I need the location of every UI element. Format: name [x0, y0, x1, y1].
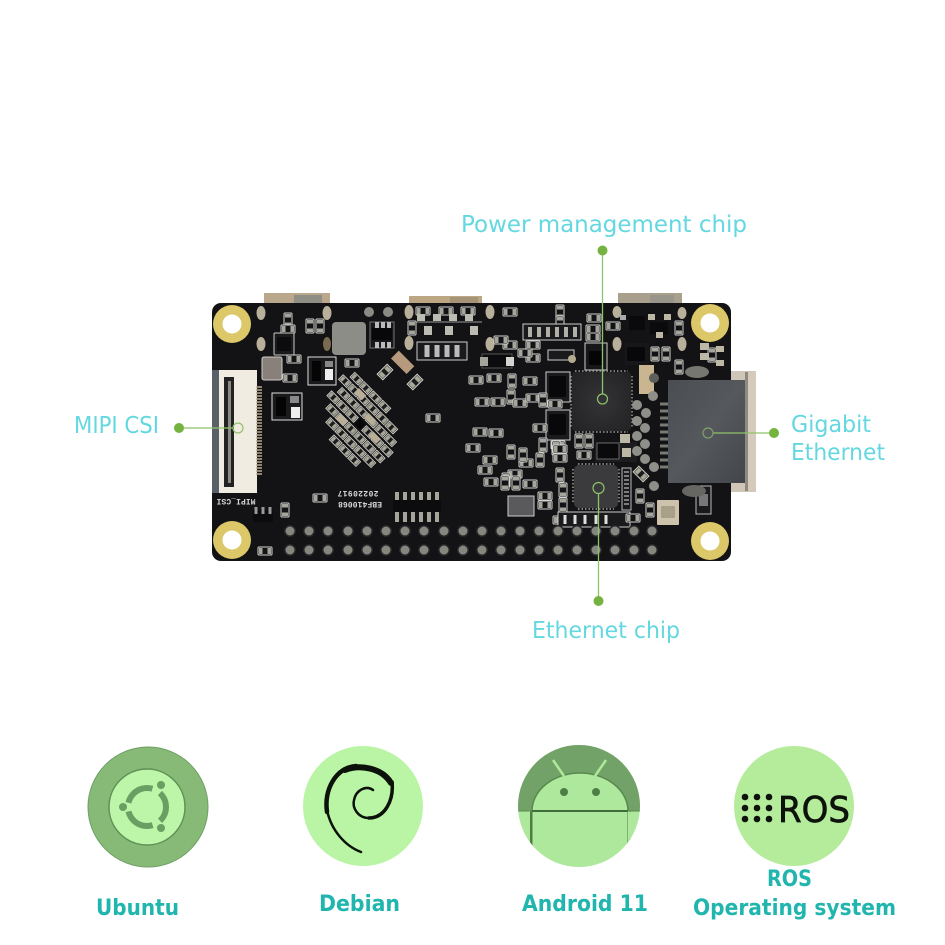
GPIO header pins — [284, 525, 658, 556]
ethernet chip — [573, 464, 619, 509]
MIPI CSI connector — [212, 370, 262, 493]
inductor — [332, 322, 366, 355]
board photo — [212, 293, 756, 561]
icon: Debian — [303, 746, 423, 866]
label: gigabit: Gigabit — [791, 412, 871, 438]
upper right components — [585, 314, 724, 394]
icon: Android — [518, 745, 640, 867]
through-hole pads near ethernet jack — [632, 373, 659, 491]
ethernet jack contacts — [660, 404, 668, 467]
PCB — [212, 303, 731, 561]
icon: Ubuntu — [88, 747, 208, 867]
small silver component — [262, 357, 282, 380]
oval pads — [256, 305, 686, 351]
label: Android 11: Android 11 — [522, 892, 648, 917]
top USB connector right — [618, 293, 682, 304]
leader dot — [594, 596, 604, 606]
leader dot — [174, 423, 184, 433]
leader line — [598, 494, 600, 601]
silkscreen date code: 20220917 — [337, 488, 378, 497]
label: Ubuntu: Ubuntu — [96, 896, 179, 921]
label: Operating system: Operating system — [693, 896, 896, 921]
long component row — [523, 324, 581, 340]
top centre components — [408, 305, 564, 407]
leader line — [179, 427, 233, 429]
left side components — [253, 313, 441, 555]
label: power management chip: Power management chip — [461, 212, 747, 238]
target ring — [598, 394, 608, 404]
diamond resistor cluster — [304, 368, 414, 478]
leader line — [602, 250, 604, 394]
power management chip — [571, 371, 632, 432]
callout: power management chip — [461, 212, 747, 404]
icon: ROS — [734, 746, 854, 866]
label: MIPI CSI: MIPI CSI — [74, 413, 159, 439]
ethernet metal shell back — [728, 371, 756, 492]
top USB connector left — [264, 293, 330, 304]
top HDMI connector — [409, 296, 482, 304]
silkscreen board code: EBF410068 — [338, 499, 382, 508]
target ring — [703, 428, 713, 438]
callout: MIPI CSI — [74, 413, 243, 439]
leader dot — [598, 246, 608, 256]
callout: ethernet chip — [532, 482, 680, 644]
middle right components — [466, 341, 711, 527]
label: ethernet: Ethernet — [791, 440, 885, 466]
ethernet jack body — [668, 372, 756, 491]
label: ethernet chip: Ethernet chip — [532, 618, 680, 644]
icon: ROS: ROS — [778, 790, 850, 831]
label: ROS: ROS — [767, 867, 812, 892]
target ring — [233, 423, 243, 433]
leader line — [713, 432, 774, 434]
target ring — [593, 482, 604, 494]
label: Debian: Debian — [319, 892, 400, 917]
silkscreen MIPI_CSI: MIPI_CSI — [216, 496, 256, 505]
leader dot — [769, 428, 779, 438]
callout: gigabit ethernet — [703, 412, 885, 466]
mounting holes — [213, 304, 729, 560]
